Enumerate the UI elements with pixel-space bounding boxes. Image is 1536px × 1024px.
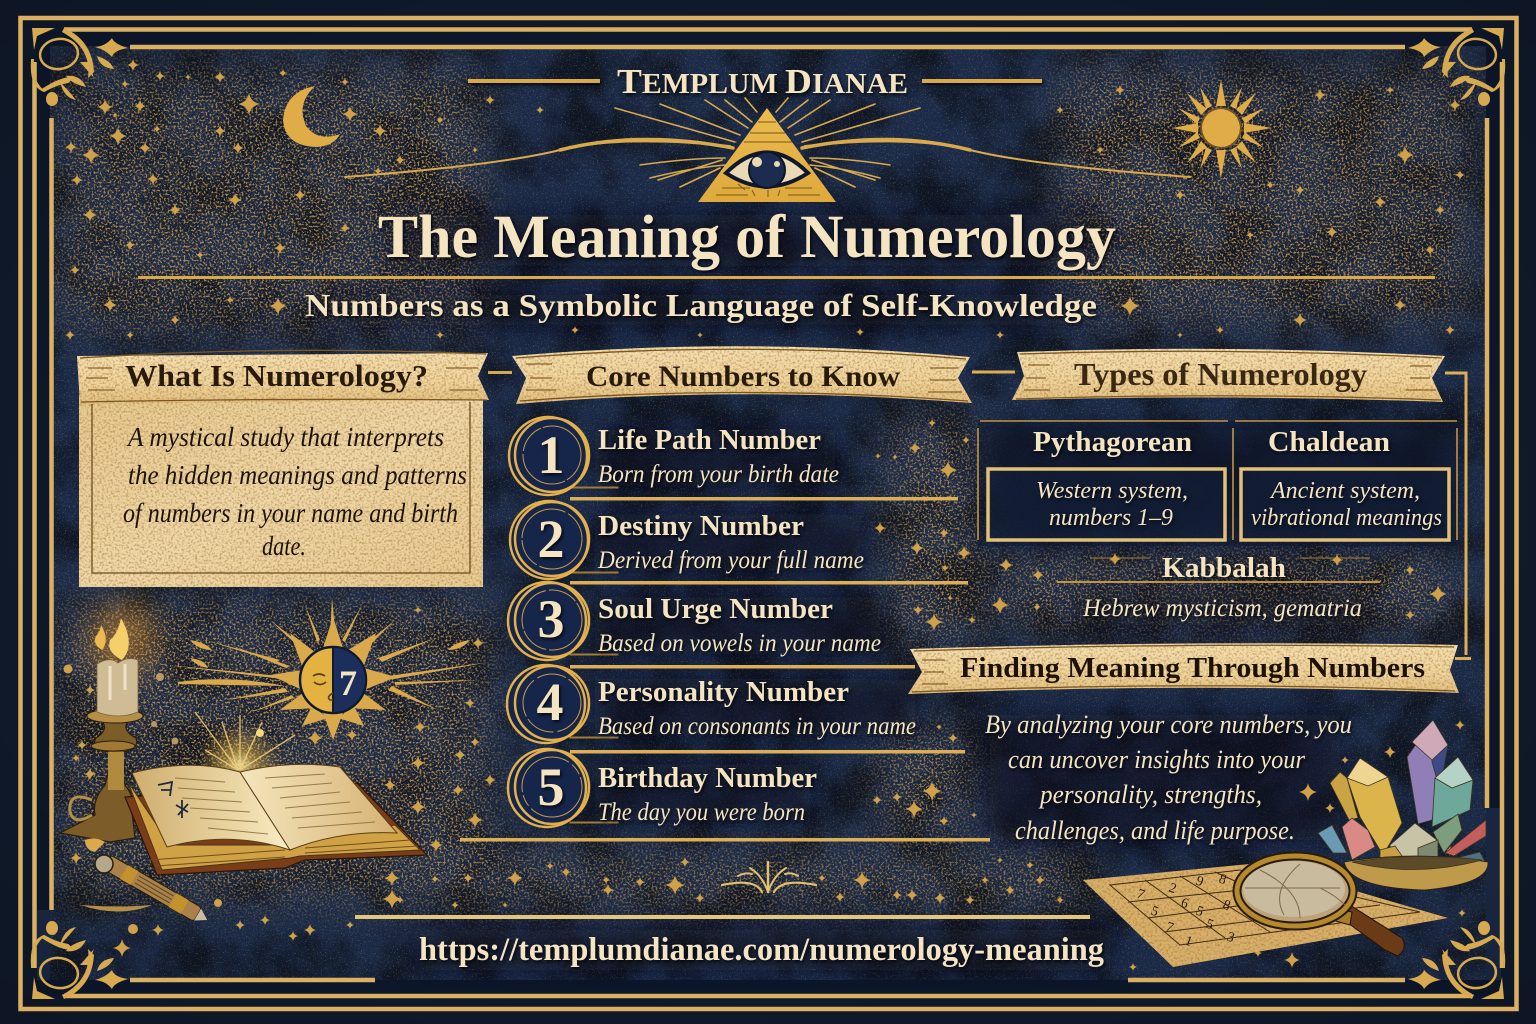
item 4: Personality Number [598, 677, 849, 708]
candle wax [97, 659, 138, 716]
icon: all-seeing eye with rays [345, 98, 1190, 202]
icon: crescent moon [283, 86, 340, 147]
connector frame [972, 372, 1466, 655]
Pythagorean [988, 426, 1225, 540]
illustration: number grid and magnifier: 1 [1183, 934, 1194, 950]
ribbon heading [512, 346, 972, 404]
url: https://templumdianae.com/numerology-meaning [419, 932, 1104, 968]
brand name: Templum Dianae [468, 62, 1042, 101]
parchment body [79, 395, 483, 587]
footer rule [355, 915, 1090, 919]
types table [978, 421, 1458, 546]
subtitle: Numbers as a Symbolic Language of Self-Knowledge [305, 287, 1097, 323]
ribbon heading [908, 643, 1459, 694]
Pythagorean: numbers 1–9 [1049, 505, 1173, 531]
item 1 [509, 417, 839, 495]
illustration: crystal bowl [1318, 720, 1488, 890]
item 5 [508, 749, 817, 827]
body text: personality, strengths, [1038, 780, 1262, 809]
ribbon heading [77, 350, 489, 404]
item 2: Derived from your full name [597, 547, 864, 574]
illustration: open book [125, 712, 427, 875]
illustration: number grid and magnifier: 8 [1217, 872, 1228, 888]
Pythagorean: Western system, [1036, 478, 1188, 504]
panel: what is numerology [77, 350, 512, 587]
definition text: A mystical study that interprets [126, 422, 444, 452]
item 1: Born from your birth date [598, 461, 839, 488]
Kabbalah: Hebrew mysticism, gematria [1082, 595, 1362, 622]
panel: finding meaning [908, 643, 1471, 845]
item 4: 4 [536, 672, 564, 732]
item 1: 1 [538, 425, 564, 485]
illustration: number grid and magnifier: 5 [1194, 904, 1205, 920]
definition text: of numbers in your name and birth [123, 498, 458, 528]
ribbon heading: Types of Numerology [1074, 356, 1367, 392]
illustration: number grid and magnifier [1083, 856, 1448, 967]
illustration: number grid and magnifier: 7 [1135, 887, 1146, 903]
item 5: The day you were born [598, 799, 805, 826]
item 4: Based on consonants in your name [598, 713, 916, 740]
panel: core numbers [460, 346, 990, 842]
body text: challenges, and life purpose. [1015, 816, 1295, 845]
item 3: Based on vowels in your name [598, 630, 881, 657]
item 2: Destiny Number [598, 511, 804, 542]
Chaldean: Chaldean [1268, 426, 1390, 458]
illustration: number grid and magnifier: 8 [1221, 898, 1232, 914]
item 3: Soul Urge Number [598, 594, 833, 625]
illustration: number grid and magnifier: 7 [1164, 920, 1175, 936]
icon: sun [1172, 80, 1272, 178]
body text [985, 710, 1352, 845]
definition text: date. [262, 531, 306, 561]
candle flames [108, 618, 130, 660]
item 5: Birthday Number [598, 763, 817, 794]
illustration: number grid and magnifier: 2 [1167, 881, 1178, 897]
item 1: Life Path Number [598, 425, 821, 456]
definition text [123, 422, 467, 561]
illustration: quill case [80, 838, 211, 927]
illustration: number grid and magnifier: 5 [1204, 917, 1215, 933]
item 4 [507, 665, 916, 743]
ribbon heading: Core Numbers to Know [586, 360, 900, 393]
Chaldean: Ancient system, [1269, 478, 1420, 504]
ribbon heading: Finding Meaning Through Numbers [960, 652, 1425, 684]
item 5: 5 [538, 757, 564, 817]
illustration: sun and moon with 7 [168, 597, 490, 740]
item 2 [510, 501, 864, 579]
illustration: sun and moon with 7: 7 [339, 663, 357, 703]
Chaldean: vibrational meanings [1251, 505, 1442, 531]
title: The Meaning of Numerology [378, 204, 1116, 271]
item 3: 3 [538, 589, 564, 649]
Kabbalah [1057, 552, 1380, 622]
illustration: candle [60, 602, 156, 842]
dividers [460, 487, 990, 842]
illustration: number grid and magnifier: 6 [1179, 896, 1190, 912]
panel: types of numerology [972, 349, 1466, 655]
illustration: number grid and magnifier: 9 [1194, 874, 1205, 890]
ornament: bottom flourish [722, 862, 816, 892]
definition text: the hidden meanings and patterns [128, 460, 467, 490]
candlestick [60, 712, 142, 842]
title rule [138, 276, 1435, 279]
body text: By analyzing your core numbers, you [985, 710, 1352, 739]
ribbon heading [1012, 349, 1445, 402]
item 2: 2 [538, 509, 564, 569]
item 3 [508, 582, 881, 660]
illustration: number grid and magnifier: 3 [1225, 930, 1236, 946]
Chaldean [1241, 426, 1449, 540]
Kabbalah: Kabbalah [1162, 552, 1286, 584]
brand name: Templum Dianae: TEMPLUM DIANAE [617, 62, 908, 101]
ribbon heading: What Is Numerology? [125, 358, 428, 393]
body text: can uncover insights into your [1008, 745, 1306, 774]
illustration: number grid and magnifier: 5 [1149, 904, 1160, 920]
Pythagorean: Pythagorean [1033, 426, 1192, 458]
